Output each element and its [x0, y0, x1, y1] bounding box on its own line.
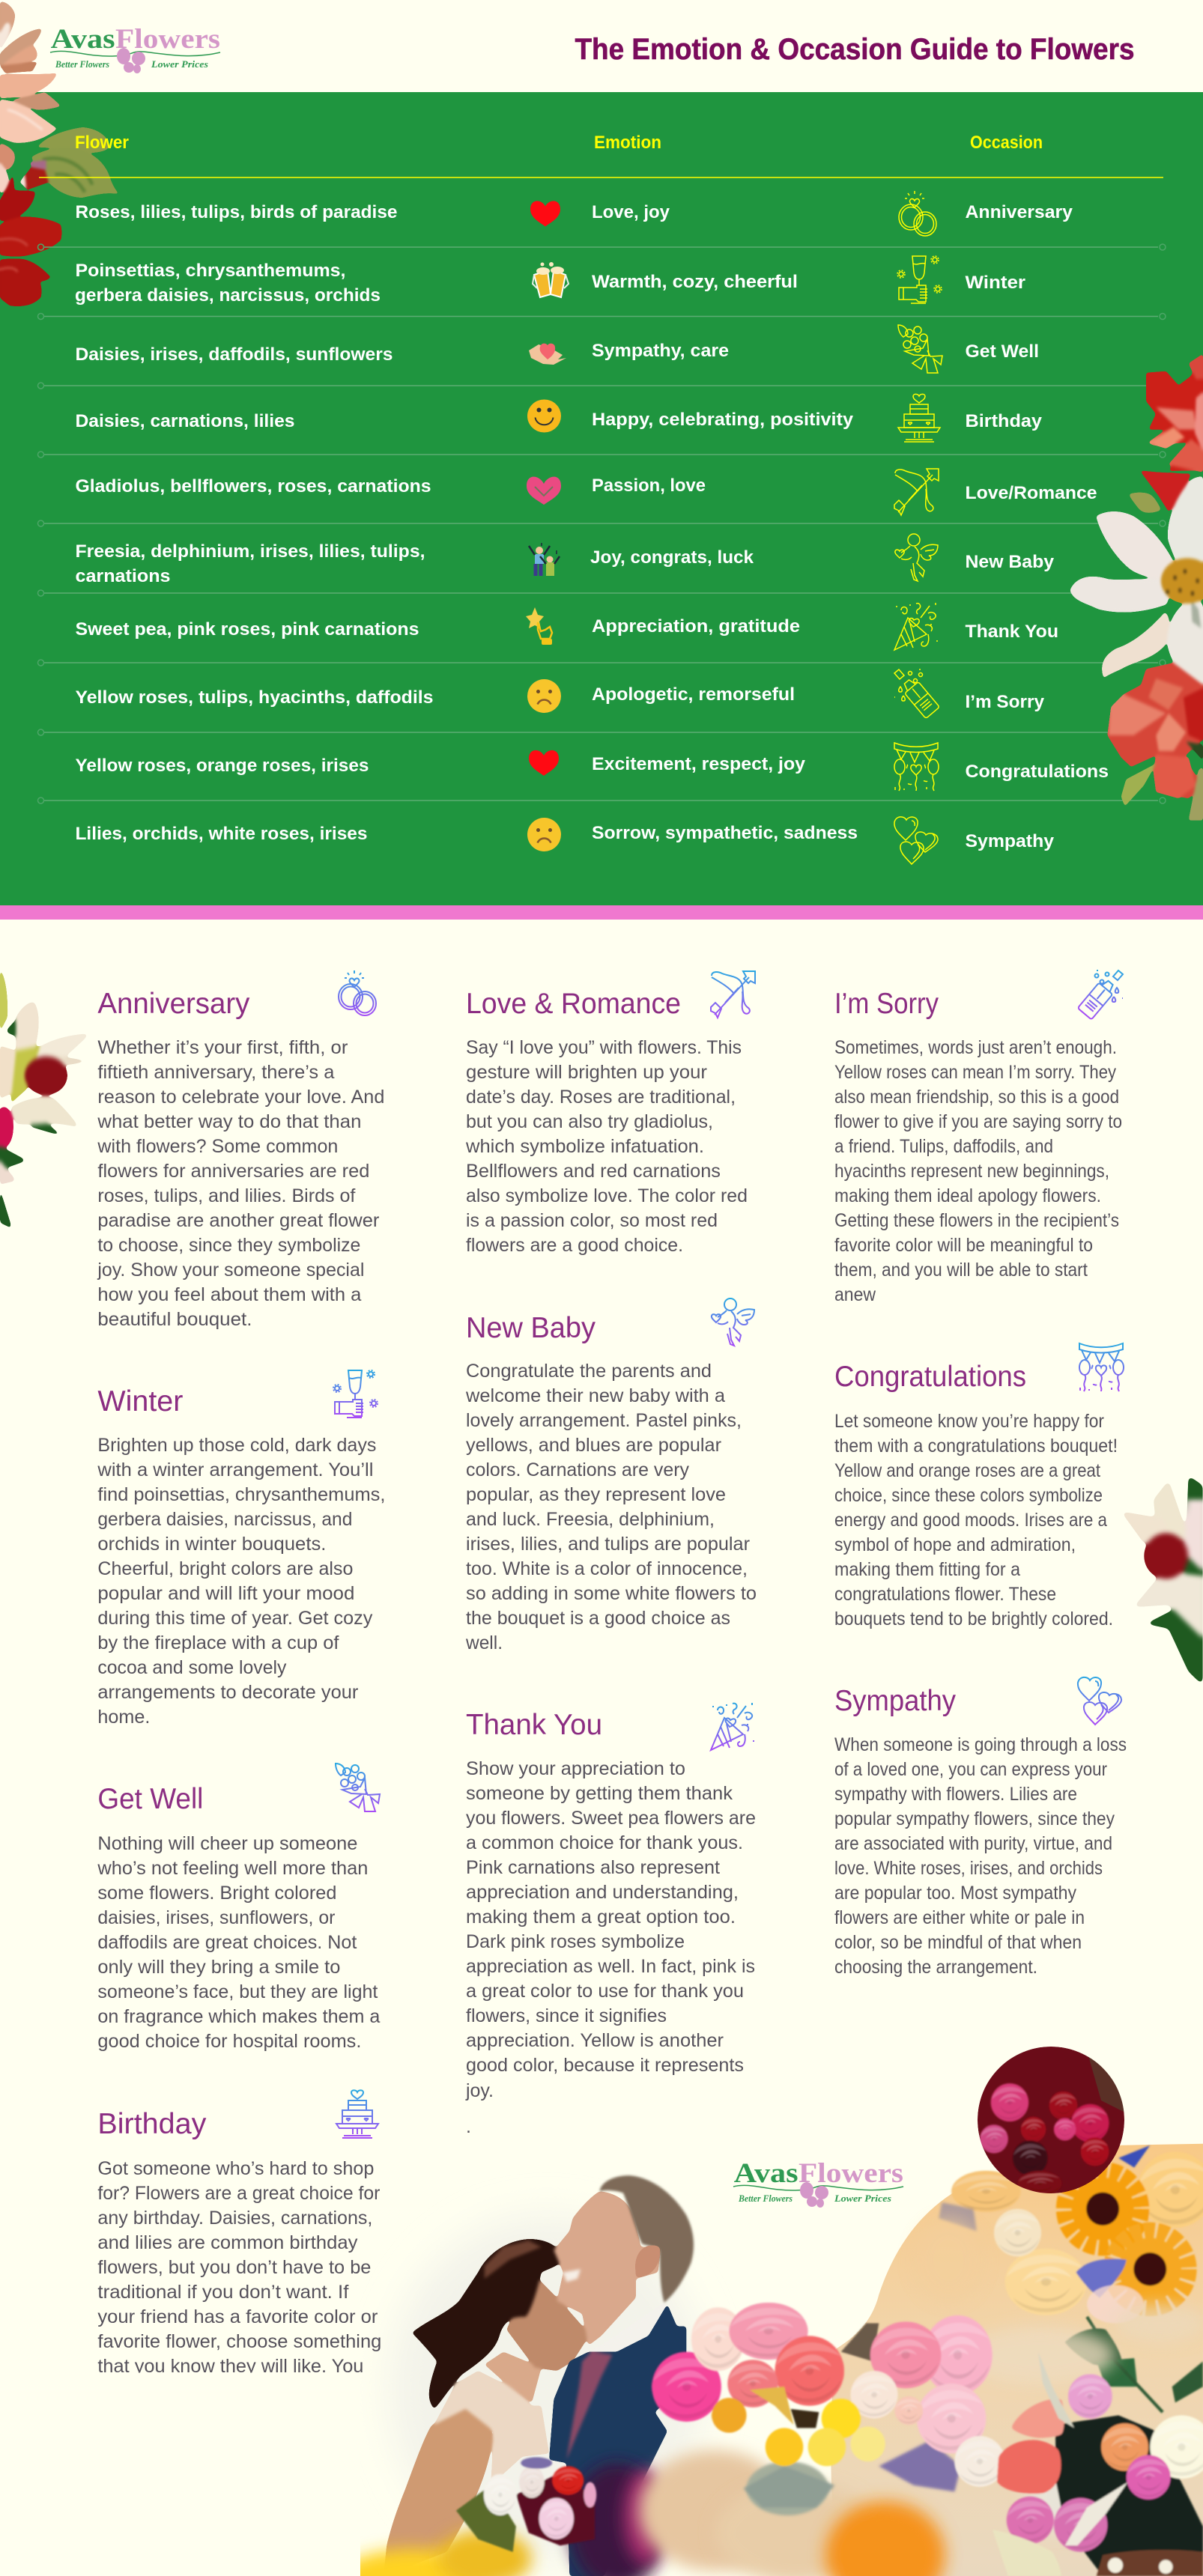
article: Winter [97, 1370, 385, 1728]
article: I'm Sorry: favorite color will be meaningful to [834, 1235, 1093, 1256]
article: Anniversary: what better way to do that than [97, 1111, 361, 1132]
couple [360, 2173, 772, 2576]
occasion column: Sympathy [965, 831, 1055, 851]
pink and yellow blooms [652, 2352, 721, 2422]
article: Thank You: a great color to use for thank you [466, 1981, 744, 2002]
article: New Baby: and luck. Freesia, delphinium, [466, 1509, 715, 1530]
article: Anniversary: roses, tulips, and lilies. Birds of [97, 1185, 355, 1206]
article: Get Well: daisies, irises, sunflowers, or [97, 1907, 335, 1928]
article: Love & Romance [465, 971, 755, 1256]
article: Anniversary: Whether it’s your first, fifth, or [97, 1037, 348, 1058]
peach wave panel [831, 2144, 1203, 2576]
article: New Baby: the bouquet is a good choice as [466, 1608, 730, 1629]
article: Sympathy: of a loved one, you can express your [834, 1759, 1107, 1780]
article: Get Well: on fragrance which makes them a [97, 2006, 380, 2027]
flower column: Sweet pea, pink roses, pink carnations [75, 619, 419, 640]
article: Winter: cocoa and some lovely [97, 1657, 287, 1678]
flower column: Lilies, orchids, white roses, irises [75, 824, 368, 844]
article: Birthday: Got someone who’s hard to shop [97, 2158, 374, 2179]
bottom logo [733, 2158, 903, 2208]
article: Sympathy: sympathy with flowers. Lilies are [834, 1784, 1077, 1805]
article: New Baby: so adding in some white flowers to [466, 1583, 757, 1604]
icon: star and pointing hand [526, 607, 552, 645]
article: New Baby: irises, lilies, and tulips are popular [466, 1534, 750, 1555]
flower column: Freesia, delphinium, irises, lilies, tulips, [75, 541, 425, 562]
article: Winter: Cheerful, bright colors are also [97, 1558, 353, 1579]
article: Get Well: someone’s face, but they are light [97, 1981, 378, 2002]
article: New Baby: Congratulate the parents and [466, 1361, 712, 1382]
photo haze [399, 2226, 691, 2552]
article: Congratulations: choice, since these colors symbolize [834, 1485, 1103, 1506]
article: Birthday: flowers, but you don’t have to be [97, 2257, 371, 2278]
article: New Baby: lovely arrangement. Pastel pinks, [466, 1410, 742, 1431]
occasion column [965, 202, 1109, 851]
emotion column: Joy, congrats, luck [590, 547, 754, 568]
article: Anniversary: joy. Show your someone special [97, 1260, 364, 1281]
article: Thank You: Thank You [466, 1709, 602, 1741]
table column headings: Occasion [970, 133, 1043, 153]
article: I'm Sorry: Yellow roses can mean I’m sorry. They [834, 1062, 1116, 1083]
table column headings: Flower [75, 133, 129, 153]
article: I'm Sorry: flower to give if you are saying sorry to [834, 1111, 1122, 1132]
article: Congratulations: making them fitting for a [834, 1559, 1020, 1580]
flower column: Roses, lilies, tulips, birds of paradise [75, 202, 397, 222]
article: New Baby: New Baby [466, 1312, 596, 1344]
article: I'm Sorry: Getting these flowers in the recipient’s [834, 1210, 1119, 1231]
article: Anniversary: with flowers? Some common [97, 1136, 338, 1157]
icon: smiley [527, 400, 561, 433]
article: Thank You: . [466, 2116, 471, 2137]
article: Thank You: you flowers. Sweet pea flowers are [466, 1808, 756, 1829]
circular rose photo [978, 2047, 1131, 2196]
flower column: gerbera daisies, narcissus, orchids [75, 285, 381, 306]
article: Congratulations: congratulations flower. These [834, 1584, 1056, 1605]
article: Love & Romance: is a passion color, so most red [466, 1210, 718, 1231]
article: Thank You: joy. [465, 2080, 494, 2101]
emotion column: Sympathy, care [592, 341, 729, 361]
article: I'm Sorry: anew [834, 1284, 876, 1305]
article: I'm Sorry: also mean friendship, so this is a good [834, 1087, 1119, 1108]
header logo: Avas [51, 24, 115, 55]
article: Birthday: any birthday. Daisies, carnations, [97, 2208, 372, 2229]
flower arrangement [652, 2145, 1203, 2576]
article: Birthday: Birthday [97, 2108, 207, 2140]
couple's bouquet [456, 2457, 596, 2552]
article: Winter: find poinsettias, chrysanthemums, [97, 1484, 385, 1505]
header logo [50, 24, 220, 73]
article: Congratulations: energy and good moods. Irises are a [834, 1510, 1107, 1531]
bottom logo: Flowers [799, 2158, 903, 2189]
article: I'm Sorry: a friend. Tulips, daffodils, and [834, 1136, 1053, 1157]
flower column: Yellow roses, tulips, hyacinths, daffodils [75, 687, 433, 708]
occasion column: Get Well [965, 341, 1039, 362]
article: Get Well [97, 1764, 380, 2052]
illustration: top left flowers [0, 2, 119, 306]
article: Congratulations: symbol of hope and admiration, [834, 1534, 1076, 1555]
article: Winter: arrangements to decorate your [97, 1682, 358, 1703]
emotion column: Appreciation, gratitude [592, 616, 800, 637]
article: Birthday [97, 2090, 381, 2377]
article: I'm Sorry: them, and you will be able to start [834, 1260, 1088, 1281]
article: Anniversary [97, 970, 384, 1330]
bottom logo: Better Flowers [738, 2193, 793, 2204]
occasion column: New Baby [965, 552, 1055, 572]
article: Sympathy: color, so be mindful of that when [834, 1932, 1082, 1953]
article: Sympathy: popular sympathy flowers, since they [834, 1808, 1115, 1829]
article: Anniversary: flowers for anniversaries are red [97, 1161, 369, 1182]
article: Winter: Brighten up those cold, dark days [97, 1435, 376, 1456]
icon: beer mugs [533, 262, 569, 297]
illustration: right side flowers [1070, 354, 1203, 821]
emotion column: Love, joy [592, 202, 670, 222]
icon: cheering people [529, 543, 560, 576]
illustration: left lily bouquet [0, 970, 92, 1228]
occasion column: I’m Sorry [965, 692, 1045, 712]
flower column: Poinsettias, chrysanthemums, [75, 261, 346, 281]
article: Winter: by the fireplace with a cup of [97, 1632, 339, 1653]
article: Love & Romance: Bellflowers and red carnations [466, 1161, 721, 1182]
article: I'm Sorry: Sometimes, words just aren’t enough. [834, 1037, 1117, 1058]
icon: red heart [529, 750, 559, 776]
article: Sympathy: love. White roses, irises, and orchids [834, 1858, 1103, 1879]
article: Love & Romance: also symbolize love. The color red [466, 1185, 748, 1206]
emotion column [590, 202, 858, 843]
article: Winter: orchids in winter bouquets. [97, 1534, 326, 1555]
basket flowers [954, 2436, 1005, 2487]
occasion column: Winter [965, 273, 1025, 293]
article: Winter: during this time of year. Get cozy [97, 1608, 373, 1629]
article: Birthday: traditional if you don’t want. If [97, 2282, 348, 2303]
article: Congratulations: them with a congratulations bouquet! [834, 1436, 1118, 1456]
emotion column: Excitement, respect, joy [592, 754, 806, 774]
bottom logo: Lower Prices [834, 2193, 891, 2204]
emotion icons [526, 201, 569, 851]
article: Thank You: Show your appreciation to [466, 1758, 685, 1779]
article: Thank You: appreciation and understanding, [466, 1882, 739, 1903]
article: Sympathy: flowers are either white or pale in [834, 1907, 1085, 1928]
flower column [75, 202, 433, 844]
article: Sympathy [834, 1677, 1127, 1978]
icon: sad face [527, 679, 561, 713]
pink divider band [0, 905, 1203, 920]
article: Congratulations: bouquets tend to be brightly colored. [834, 1609, 1113, 1629]
article: Anniversary: how you feel about them with a [97, 1284, 361, 1305]
occasion column: Congratulations [965, 762, 1109, 782]
article: Love & Romance: Say “I love you” with flowers. This [466, 1037, 742, 1058]
article: Get Well: Get Well [97, 1783, 203, 1815]
article: Birthday: favorite flower, choose something [97, 2331, 381, 2352]
article: Anniversary: Anniversary [97, 988, 250, 1020]
header logo: Better Flowers [55, 59, 109, 70]
article: Get Well: some flowers. Bright colored [97, 1883, 336, 1904]
article: Birthday: that you know they will like. You [97, 2356, 363, 2377]
article: Thank You: appreciation. Yellow is another [466, 2030, 724, 2051]
article: I'm Sorry: I’m Sorry [834, 988, 939, 1020]
article: Anniversary: beautiful bouquet. [97, 1309, 252, 1330]
article: Anniversary: fiftieth anniversary, there’s a [97, 1062, 334, 1083]
article: Thank You: appreciation as well. In fact, pink is [466, 1956, 755, 1977]
flower column: Yellow roses, orange roses, irises [75, 756, 369, 776]
article: Anniversary: paradise are another great flower [97, 1210, 379, 1231]
article: I'm Sorry [834, 970, 1123, 1305]
article: New Baby: welcome their new baby with a [465, 1385, 725, 1406]
article: I'm Sorry: making them ideal apology flowers. [834, 1185, 1101, 1206]
table column headings: Emotion [594, 133, 661, 153]
article: New Baby: too. White is a color of innocence, [466, 1558, 748, 1579]
article: Thank You: Dark pink roses symbolize [466, 1931, 685, 1952]
table rules [37, 177, 1166, 804]
emotion column: Happy, celebrating, positivity [592, 410, 854, 430]
green table panel [0, 92, 1203, 905]
table column headings [75, 133, 1043, 153]
article: Thank You: making them a great option too. [466, 1907, 736, 1928]
article: Get Well: who’s not feeling well more than [97, 1858, 368, 1879]
article: Winter: Winter [97, 1385, 183, 1418]
article: Congratulations: Yellow and orange roses are a great [834, 1460, 1100, 1481]
article: Winter: gerbera daisies, narcissus, and [97, 1509, 352, 1530]
article: I'm Sorry: hyacinths represent new beginnings, [834, 1161, 1109, 1182]
emotion column: Warmth, cozy, cheerful [592, 272, 798, 292]
article: Thank You: someone by getting them thank [466, 1783, 733, 1804]
icon: pink heart [527, 477, 561, 505]
illustration: right lily bouquet [1121, 1476, 1202, 1685]
emotion column: Sorrow, sympathetic, sadness [592, 823, 858, 843]
icon: red heart [530, 201, 560, 226]
article: Birthday: your friend has a favorite color or [97, 2306, 378, 2327]
article: Anniversary: to choose, since they symbolize [97, 1235, 360, 1256]
header logo: Flowers [115, 24, 220, 55]
article: Sympathy: choosing the arrangement. [834, 1957, 1037, 1978]
occasion icons [894, 191, 942, 864]
article: Thank You: flowers, since it signifies [466, 2005, 667, 2026]
occasion articles [97, 970, 1127, 2377]
article: Thank You: good color, because it represents [466, 2055, 744, 2076]
article: Congratulations: Congratulations [834, 1361, 1026, 1393]
article: Congratulations [834, 1343, 1124, 1629]
article: Sympathy: are popular too. Most sympathy [834, 1883, 1076, 1904]
article: Winter: home. [97, 1707, 150, 1728]
article: Sympathy: Sympathy [834, 1685, 956, 1717]
article: Thank You: a common choice for thank yous. [466, 1832, 743, 1853]
article: Get Well: daffodils are great choices. Not [97, 1932, 357, 1953]
article: Winter: popular and will lift your mood [97, 1583, 354, 1604]
icon: hand with heart [529, 344, 566, 365]
article: Winter: with a winter arrangement. You’ll [97, 1459, 373, 1480]
flower column: Daisies, carnations, lilies [75, 411, 295, 431]
title: The Emotion & Occasion Guide to Flowers [575, 33, 1134, 66]
faded yellow blooms [951, 2171, 1021, 2212]
article: Get Well: good choice for hospital rooms. [97, 2031, 361, 2052]
article: Love & Romance: date’s day. Roses are traditional, [466, 1087, 736, 1108]
flower column: carnations [75, 566, 171, 586]
icon: sad face [527, 818, 561, 851]
occasion column: Anniversary [965, 202, 1073, 222]
article: New Baby: popular, as they represent love [466, 1484, 726, 1505]
article: Get Well: only will they bring a smile to [97, 1957, 340, 1978]
bottom photo collage [339, 2144, 1203, 2576]
emotion column: Apologetic, remorseful [592, 684, 795, 705]
flower column: Gladiolus, bellflowers, roses, carnations [75, 476, 431, 496]
article: Get Well: Nothing will cheer up someone [97, 1833, 357, 1854]
article: Birthday: for? Flowers are a great choice for [97, 2183, 380, 2204]
article: Sympathy: are associated with purity, virtue, and [834, 1833, 1112, 1854]
article: Love & Romance: gesture will brighten up your [466, 1062, 707, 1083]
article: New Baby: colors. Carnations are very [466, 1459, 689, 1480]
header logo: Lower Prices [151, 59, 208, 70]
article: Sympathy: When someone is going through a loss [834, 1734, 1127, 1755]
article: Anniversary: reason to celebrate your love. And [97, 1087, 384, 1108]
occasion column: Love/Romance [965, 483, 1097, 503]
article: Birthday: and lilies are common birthday [97, 2232, 358, 2253]
article: New Baby [465, 1298, 757, 1653]
article: New Baby: well. [465, 1632, 503, 1653]
article: Love & Romance: Love & Romance [466, 988, 681, 1020]
article: Thank You: Pink carnations also represent [466, 1857, 720, 1878]
article: Thank You [465, 1703, 756, 2137]
flower column: Daisies, irises, daffodils, sunflowers [75, 344, 393, 365]
occasion column: Birthday [965, 411, 1043, 431]
article: Love & Romance: flowers are a good choice. [466, 1235, 683, 1256]
article: Love & Romance: which symbolize infatuation. [465, 1136, 704, 1157]
emotion column: Passion, love [592, 476, 706, 496]
occasion column: Thank You [965, 622, 1058, 642]
bottom logo: Avas [734, 2158, 799, 2189]
article: Congratulations: Let someone know you’re happy for [834, 1411, 1104, 1432]
article: New Baby: yellows, and blues are popular [466, 1435, 721, 1456]
article: Love & Romance: but you can also try gladiolus, [466, 1111, 713, 1132]
